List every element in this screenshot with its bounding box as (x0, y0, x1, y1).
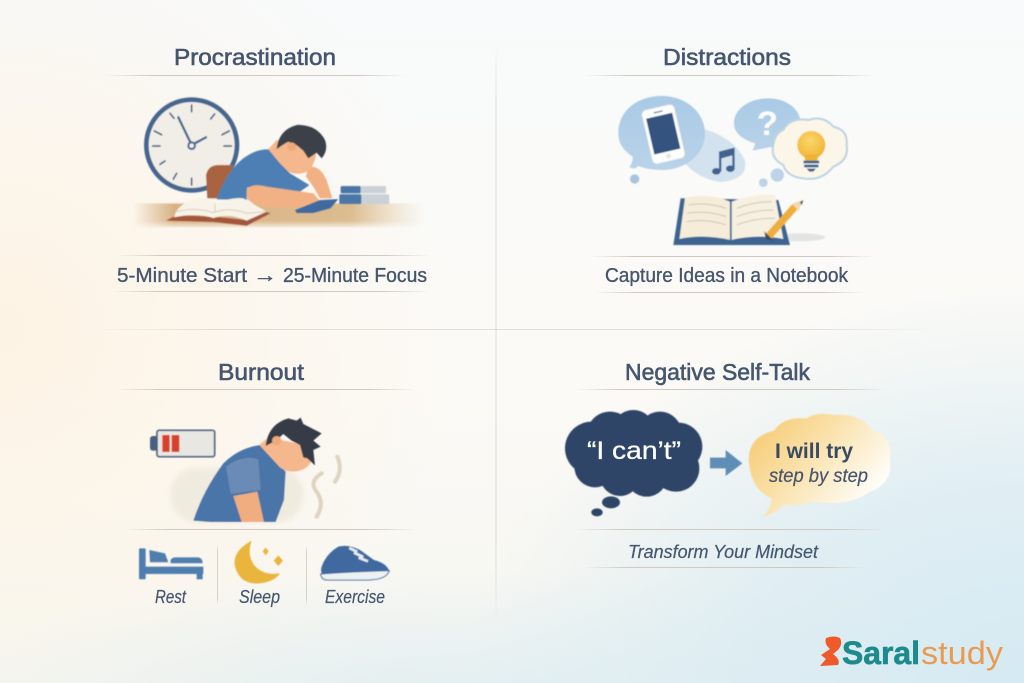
chair (206, 165, 233, 198)
caption: 5-minute start to 25-minute focus: 25-Minute Focus (283, 265, 427, 287)
steam wisps (313, 457, 340, 517)
logo: saralstudy (820, 635, 1003, 671)
logo icon (820, 636, 841, 666)
yellow speech bubble (749, 414, 890, 517)
illustration: thought bubbles and notebook (618, 96, 847, 245)
logo wordmark: Saral (842, 635, 920, 671)
heading: distractions: Distractions (663, 44, 791, 70)
illustration: tired student with battery (139, 418, 389, 583)
panel: procrastination (105, 44, 430, 292)
dark thought cloud (565, 410, 702, 516)
caption: 5-minute start to 25-minute focus: 5-Minute Start (117, 265, 247, 287)
heading: burnout: Burnout (218, 359, 305, 385)
text: step by step: step by step (769, 466, 868, 487)
caption: capture ideas: Capture Ideas in a Notebook (605, 265, 849, 287)
student (217, 125, 332, 207)
tired student (193, 418, 322, 522)
music bubble (685, 128, 745, 182)
tablet (295, 199, 338, 213)
label: sleep: Sleep (239, 587, 280, 607)
open book (166, 198, 271, 226)
backdrop blob (171, 467, 303, 522)
icon: phone (641, 104, 686, 165)
arrow (710, 450, 742, 476)
panel: burnout (115, 359, 415, 607)
caption: transform your mindset: Transform Your Mindset (628, 542, 819, 562)
illustration: mindset change (565, 410, 890, 517)
label: rest: Rest (155, 587, 187, 607)
stacked books (339, 186, 389, 204)
lightbulb cloud (759, 118, 847, 187)
icon: low battery (150, 430, 215, 457)
label: exercise: Exercise (325, 587, 385, 607)
question bubble (734, 98, 801, 151)
logo wordmark light: study (921, 635, 1003, 671)
panel: negative self-talk (565, 359, 890, 568)
text: i will try: I will try (775, 440, 853, 463)
illustration: student at desk with clock (133, 100, 423, 227)
icon: sneaker (321, 546, 389, 580)
text: i can't: “I can’t” (587, 437, 681, 465)
icon: moon and stars (235, 541, 283, 583)
notebook (673, 195, 825, 245)
phone bubble (618, 96, 705, 170)
caption: 5-minute start to 25-minute focus (117, 265, 427, 287)
question bubble: ? (757, 105, 778, 143)
caption: 5-minute start to 25-minute focus: → (253, 265, 277, 287)
heading: procrastination: Procrastination (174, 44, 336, 70)
pencil (766, 200, 803, 239)
heading: negative self-talk: Negative Self-Talk (625, 359, 810, 385)
icon: music notes (712, 148, 735, 175)
icon: bed (139, 548, 203, 579)
icon: wall clock (146, 100, 237, 190)
panel: distractions (585, 44, 875, 293)
desk (133, 203, 423, 227)
